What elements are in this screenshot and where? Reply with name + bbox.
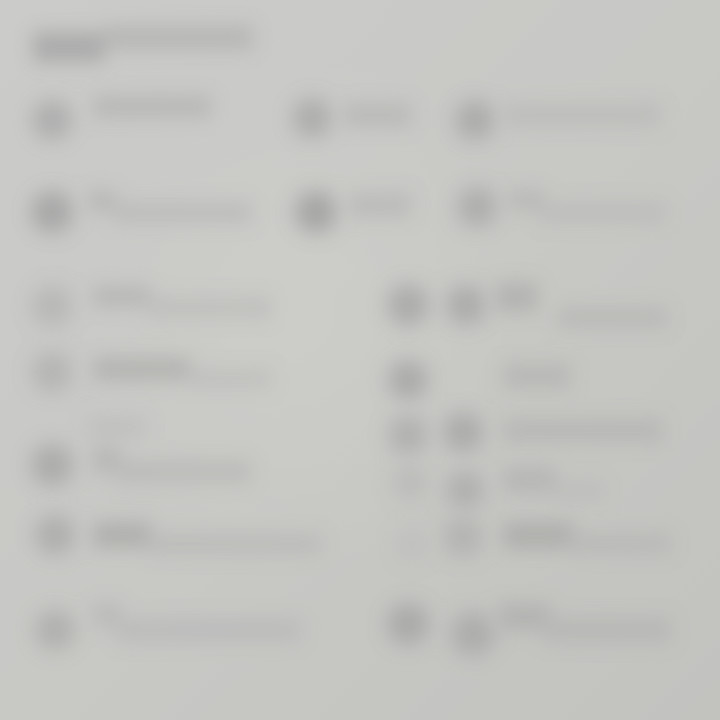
left column item 5 bbox=[35, 603, 301, 650]
icon: circle bbox=[35, 515, 75, 555]
right column row 3 bbox=[388, 412, 663, 455]
right column row 1 bbox=[387, 282, 667, 328]
icon: outer circle bbox=[388, 360, 428, 400]
left column item 4 bbox=[35, 515, 321, 555]
icon: circle bbox=[31, 444, 73, 486]
icon: circle bbox=[32, 286, 72, 326]
text block bbox=[93, 357, 271, 388]
icon: circle bbox=[457, 187, 497, 227]
text block bbox=[508, 190, 666, 223]
second row item 3 bbox=[457, 187, 666, 227]
text block bbox=[503, 467, 604, 499]
icon: circle bbox=[32, 100, 72, 140]
icon: outer circle bbox=[397, 530, 427, 560]
icon: inner circle bbox=[443, 517, 483, 557]
left column item 1 bbox=[32, 286, 272, 326]
icon: outer circle bbox=[388, 415, 428, 455]
second row item 1 bbox=[31, 190, 251, 233]
icon: outer circle bbox=[392, 464, 428, 500]
text block bbox=[503, 522, 671, 554]
text block bbox=[343, 103, 411, 127]
text block bbox=[503, 363, 571, 389]
text block bbox=[495, 282, 667, 328]
text block bbox=[93, 522, 321, 555]
top row item 3 bbox=[455, 100, 661, 140]
text block bbox=[88, 190, 251, 223]
icon: outer circle bbox=[387, 603, 429, 645]
left column item 2 bbox=[32, 352, 271, 392]
text block bbox=[88, 417, 251, 483]
icon: circle bbox=[295, 191, 337, 233]
background glow bbox=[60, 50, 520, 570]
icon: inner circle bbox=[451, 612, 495, 656]
icon: circle bbox=[455, 100, 495, 140]
right column row 5 bbox=[397, 517, 671, 560]
text block bbox=[503, 103, 661, 127]
title bbox=[33, 25, 253, 62]
icon: inner circle bbox=[443, 412, 483, 452]
icon: inner circle bbox=[446, 471, 484, 509]
text block bbox=[93, 95, 211, 118]
text block bbox=[93, 603, 301, 642]
icon: circle bbox=[35, 610, 75, 650]
icon: circle bbox=[32, 352, 72, 392]
top row item 1 bbox=[32, 95, 211, 140]
infographic content bbox=[31, 25, 671, 656]
icon: outer circle bbox=[387, 284, 429, 326]
left column item 3 bbox=[31, 417, 251, 486]
icon: circle bbox=[31, 191, 73, 233]
icon: inner circle bbox=[446, 285, 486, 325]
right column row 2 bbox=[388, 360, 571, 400]
right column row 4 bbox=[392, 464, 604, 509]
text block bbox=[348, 192, 411, 218]
top row item 2 bbox=[292, 98, 411, 138]
text block bbox=[503, 418, 663, 443]
right column row 6 bbox=[387, 603, 671, 656]
text block bbox=[93, 286, 272, 318]
second row item 2 bbox=[295, 191, 411, 233]
text block bbox=[498, 603, 671, 643]
icon: circle bbox=[292, 98, 332, 138]
